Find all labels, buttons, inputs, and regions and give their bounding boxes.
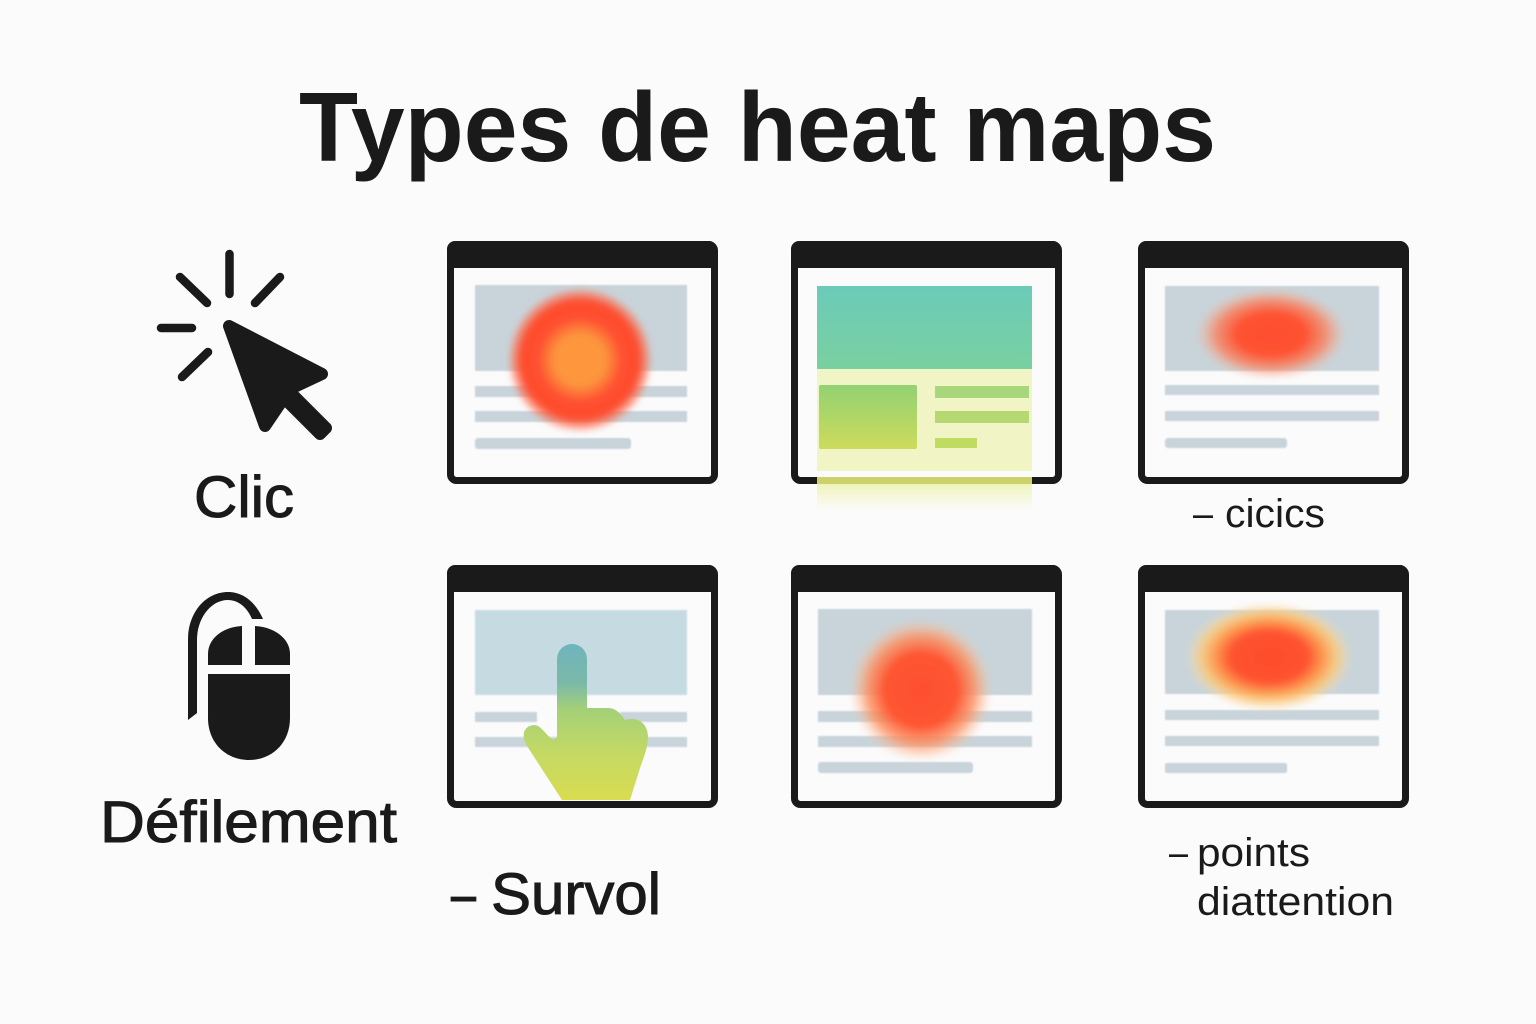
caption: points d'attention [1169,831,1394,924]
icon: mouse [188,592,290,760]
label: Clic: Clic [194,465,294,530]
caption: Survol: Survol [491,862,661,927]
caption: cicics: cicics [1225,492,1325,536]
scroll gradient zones [817,286,1032,511]
click hotspot [507,287,653,433]
panel: attention heat map [1138,565,1408,804]
icon: click cursor [161,254,326,434]
icon: pointing hand [524,644,648,800]
caption: Survol: – [451,862,477,927]
panel: scroll hotspot heat map [791,565,1061,804]
title: Types de heat maps [299,72,1216,182]
panel: click heat map [447,241,717,480]
panel: clicks heat map [1138,241,1408,480]
panel: hover heat map [447,565,717,804]
round hotspot [849,618,993,762]
caption: points d'attention: diattention [1197,880,1394,924]
oval hotspot [1195,288,1347,380]
label: Défilement: Défilement [100,790,397,855]
caption: points d'attention: points [1197,831,1310,875]
caption: cicics: – [1193,492,1214,536]
panel: scroll heat map [791,241,1061,511]
attention hotspot [1185,602,1353,712]
caption: points d'attention: – [1169,831,1189,875]
